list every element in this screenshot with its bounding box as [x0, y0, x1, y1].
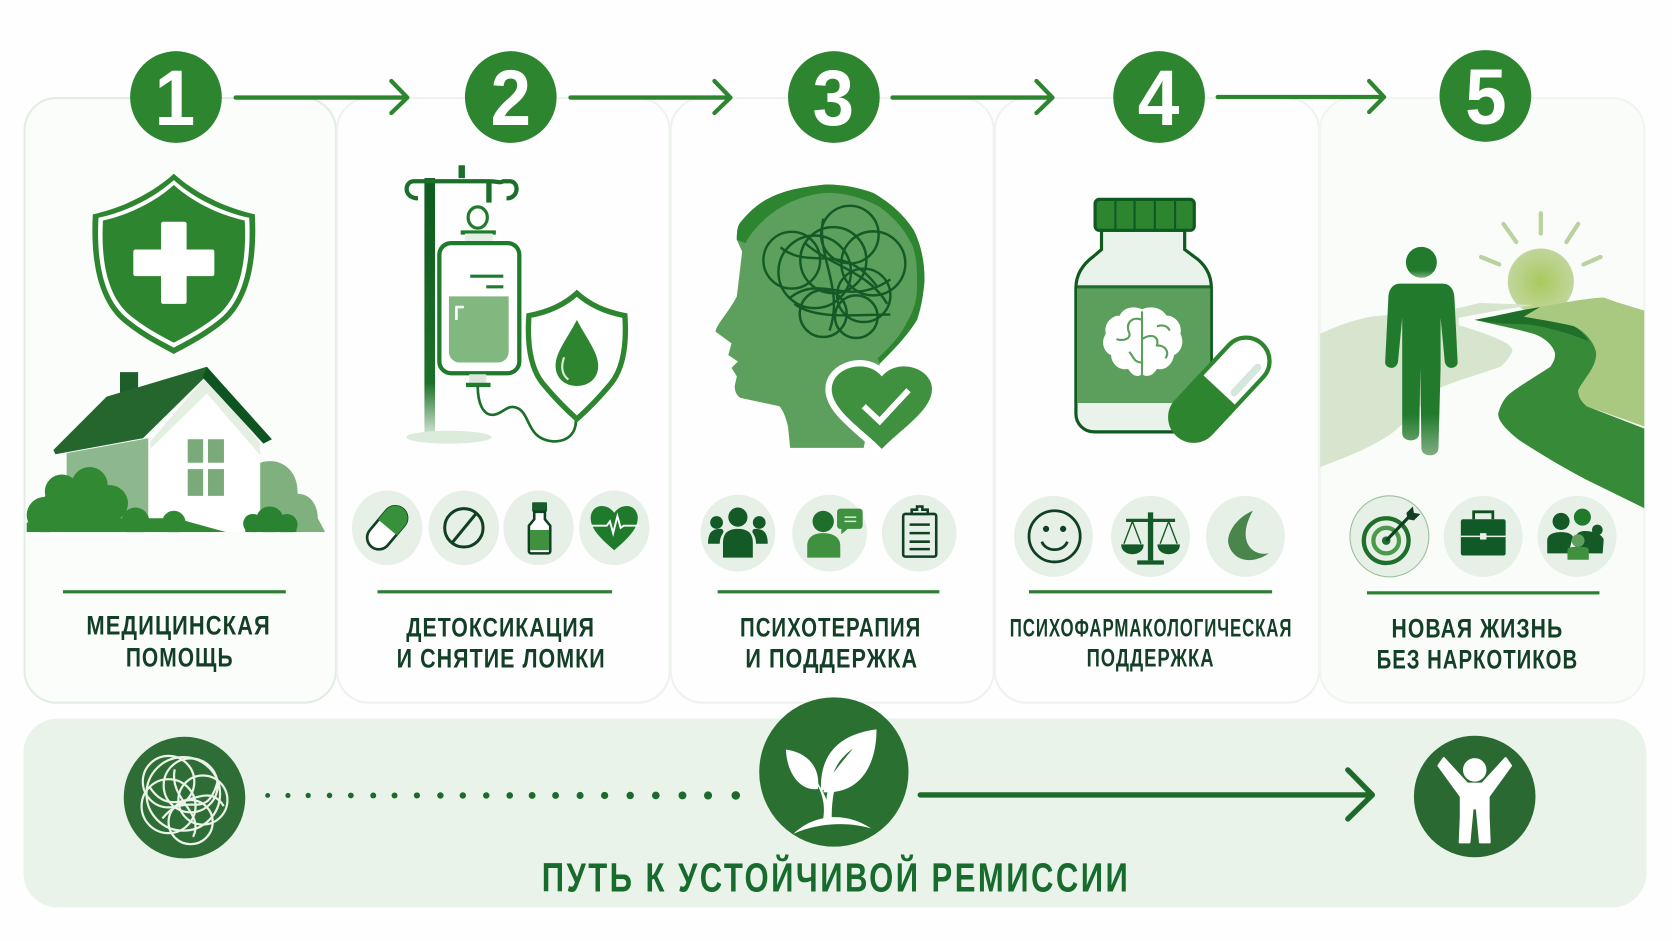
label: medical help: МЕДИЦИНСКАЯ	[86, 610, 271, 640]
icon row: mood, balance, sleep	[1014, 496, 1285, 577]
number badge 1: 1	[155, 54, 195, 142]
icon: clipboard	[903, 506, 936, 557]
number badge 1	[130, 51, 222, 143]
arrow 3 to 4	[893, 81, 1052, 113]
icon: group of people	[708, 508, 768, 558]
icon: briefcase	[1461, 512, 1506, 556]
label: new life	[1377, 614, 1578, 675]
label: psychotherapy: И ПОДДЕРЖКА	[745, 643, 918, 673]
label: detox	[397, 613, 606, 673]
divider	[377, 590, 612, 593]
icon: scales	[1122, 513, 1179, 564]
number badge 2: 2	[491, 54, 531, 142]
heading: path to stable remission: ПУТЬ К УСТОЙЧИВОЙ РЕМИССИИ	[542, 854, 1130, 900]
arrow 1 to 2	[236, 81, 407, 113]
icon: forbidden sign	[445, 509, 483, 547]
icon row: detox symbols	[352, 490, 649, 565]
number badge 4: 4	[1138, 54, 1179, 142]
icon row: therapy symbols	[701, 495, 956, 572]
divider	[718, 590, 939, 593]
label: pharmacological support	[1010, 616, 1292, 672]
bushes	[27, 461, 325, 535]
icon: sprout circle	[759, 697, 909, 847]
number badge 3	[788, 51, 880, 143]
number badge 5: 5	[1465, 53, 1507, 141]
panel: step 1 medical help	[25, 98, 336, 703]
label: pharmacological support: ПСИХОФАРМАКОЛОГИЧЕСКАЯ	[1010, 616, 1292, 643]
label: detox: ДЕТОКСИКАЦИЯ	[406, 613, 595, 643]
icon: IV drip and shield	[406, 166, 625, 444]
divider	[63, 590, 286, 593]
label: medical help	[86, 610, 271, 672]
figure: person	[1385, 247, 1458, 455]
icon: smiley	[1029, 511, 1080, 562]
label: pharmacological support: ПОДДЕРЖКА	[1087, 645, 1215, 672]
icon: person with raised arms	[1414, 736, 1535, 857]
icon row: goal, work, family	[1350, 496, 1617, 577]
label: psychotherapy: ПСИХОТЕРАПИЯ	[740, 613, 921, 643]
panel: path to remission band	[23, 719, 1646, 907]
dotted line	[265, 791, 740, 800]
arrow 4 to 5	[1218, 81, 1384, 112]
label: psychotherapy	[740, 613, 921, 673]
icon: small bottle	[529, 502, 550, 553]
brain	[1103, 307, 1182, 376]
label: new life: НОВАЯ ЖИЗНЬ	[1392, 614, 1563, 644]
label: medical help: ПОМОЩЬ	[126, 642, 234, 672]
illustration: person on road to sunrise	[1320, 213, 1647, 510]
number badge 3: 3	[813, 54, 854, 142]
panel: step 5 new life	[1320, 98, 1647, 703]
label: detox: И СНЯТИЕ ЛОМКИ	[397, 643, 606, 673]
divider	[1029, 590, 1272, 593]
panel: step 3 psychotherapy	[671, 98, 994, 703]
icon: target with arrow	[1364, 506, 1420, 563]
number badge 4	[1113, 51, 1205, 143]
icon: heart with pulse	[591, 506, 639, 550]
number badge 5	[1440, 50, 1531, 142]
icon: shield with cross	[92, 174, 255, 354]
icon: capsule	[362, 501, 412, 554]
capsule	[1161, 328, 1279, 450]
icon: family	[1547, 509, 1604, 560]
icon: medicine bottle with brain and capsule	[1076, 199, 1279, 450]
divider	[1367, 591, 1599, 594]
icon: tangled circle	[124, 737, 245, 858]
icon: person with speech bubble	[807, 509, 863, 558]
icon: head with tangled thoughts and heart	[716, 184, 932, 449]
number badge 2	[465, 51, 557, 143]
tangled lines	[763, 206, 905, 338]
panel: step 4 pharmacology	[995, 98, 1319, 703]
arrow 2 to 3	[570, 81, 730, 113]
arrow to final circle	[920, 770, 1372, 819]
label: new life: БЕЗ НАРКОТИКОВ	[1377, 645, 1578, 675]
icon: house with bushes	[27, 367, 325, 535]
icon: crescent moon	[1228, 511, 1269, 560]
panel: step 2 detox	[337, 98, 670, 703]
